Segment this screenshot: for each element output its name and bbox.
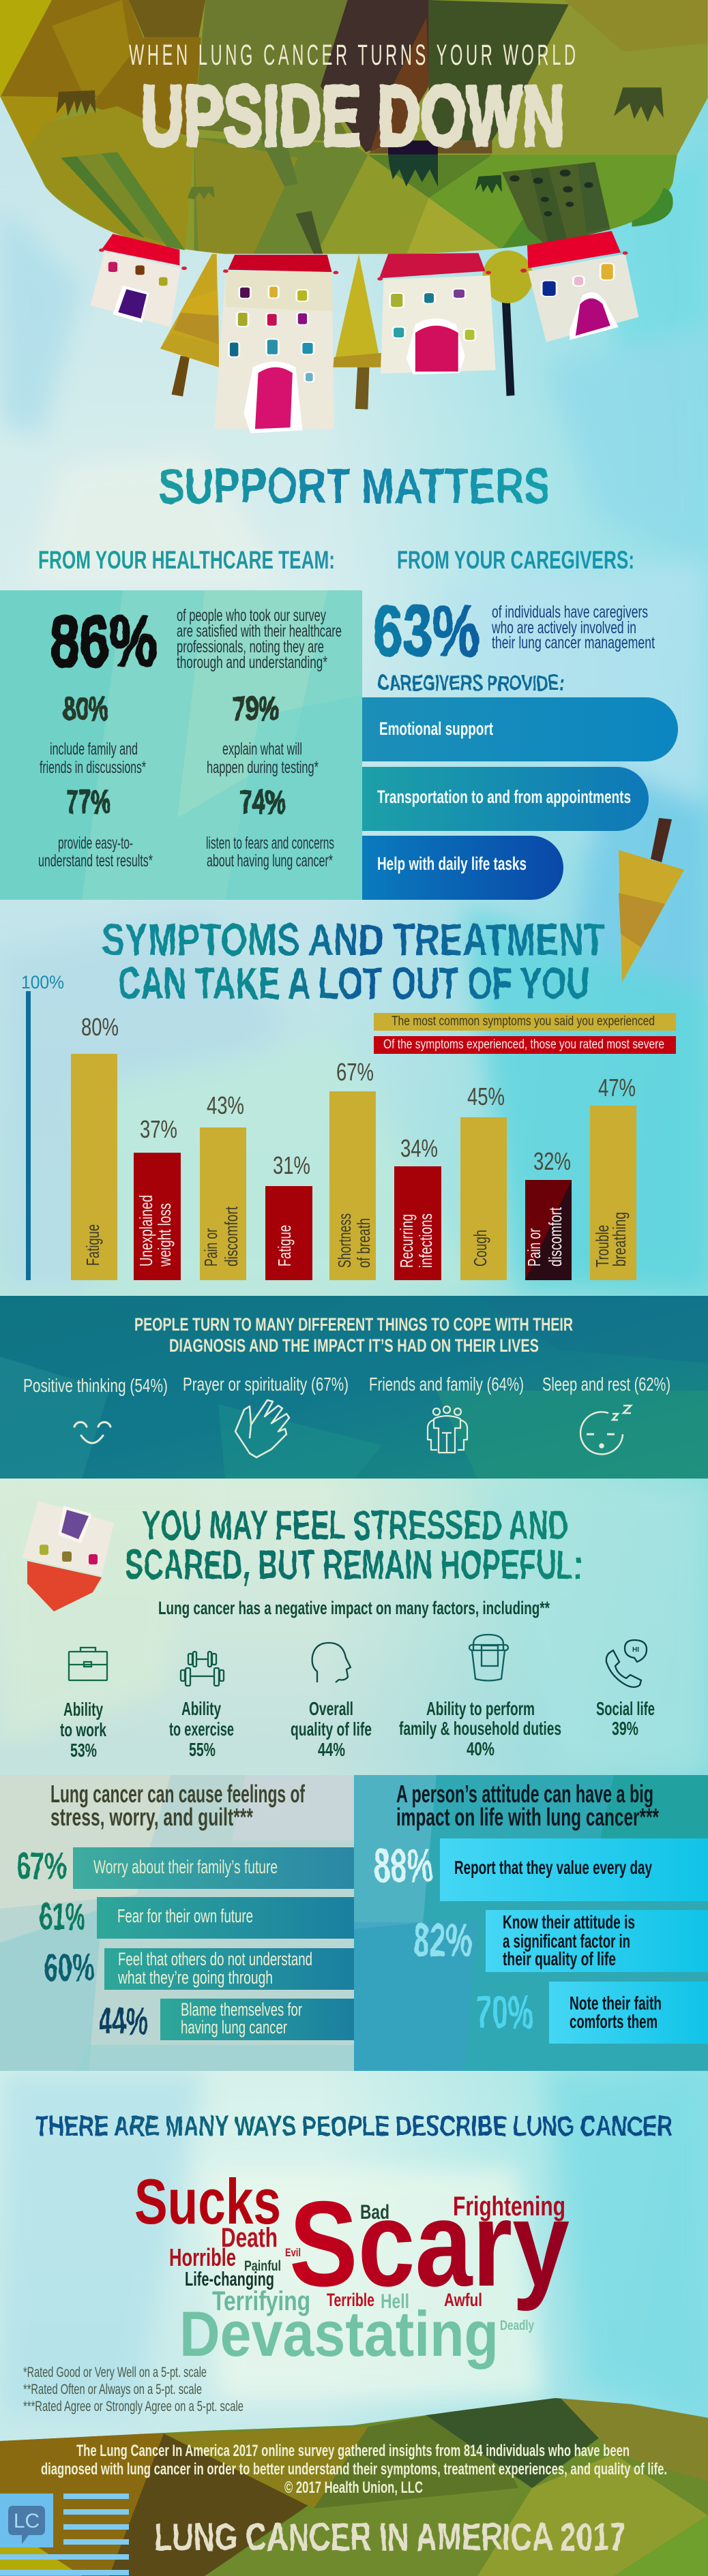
bar: recurring infections 34 [394,1134,441,1280]
bar: others do not understand [44,1945,354,1990]
text: satisfied with healthcare professionals [177,606,342,672]
bar: fear for future: 61% [40,1895,86,1938]
bar: significant factor: a significant factor in [503,1930,630,1952]
pill: daily tasks [362,836,563,900]
bar: unexplained weight loss 37: Unexplained [136,1195,156,1267]
factor: social life [596,1640,655,1739]
bar: shortness of breath 67: of breath [353,1218,374,1268]
bar: recurring infections 34: Recurring [396,1214,417,1268]
bar: fatigue 31: Fatigue [274,1225,295,1267]
bar: trouble breathing 47: 47% [598,1074,636,1102]
factor: ability to work: to work [60,1719,106,1740]
stat: 79 percent: explain what will [222,740,302,759]
bar: significant factor: Know their attitude is [503,1911,635,1933]
factor: social life: HI [632,1646,639,1654]
axis: 100% [21,972,64,992]
stat: 63 percent caregivers [373,591,655,671]
word cloud: Terrible [327,2290,374,2310]
bar: pain or discomfort 32 [524,1147,572,1280]
word cloud: Devastating [179,2298,499,2369]
factor: ability to exercise [169,1652,234,1760]
panel: coping band [0,1296,708,1479]
bar: significant factor [413,1910,708,1972]
heading: from your healthcare team: FROM YOUR HEALTHCARE TEAM: [38,546,335,574]
text: satisfied with healthcare professionals: thorough and understanding* [177,653,327,672]
stat: 86 percent: 86% [50,601,157,682]
stat: 74 percent: listen to fears and concerns [206,834,334,853]
stat: 80 percent: 80% [63,691,108,727]
bar: faith comforts: comforts them [570,2011,658,2032]
stat: 77 percent: understand test results* [38,851,153,870]
bar: pain or discomfort 43: 43% [207,1091,244,1119]
bar: fatigue 80: 80% [81,1013,119,1041]
bar: shortness of breath 67: Shortness [334,1213,355,1268]
footnotes [23,2365,244,2414]
stat: 79 percent: happen during testing* [207,758,319,777]
icon: mini upside-down house [23,1501,114,1611]
stat: 63 percent caregivers: who are actively involved in [491,618,636,637]
bar: shortness of breath 67: 67% [336,1058,374,1086]
text: survey description: © 2017 Health Union, LLC [284,2479,423,2497]
bar: trouble breathing 47 [590,1074,636,1280]
text: survey description [41,2442,667,2497]
bar: pain or discomfort 43 [200,1091,246,1280]
bar: value every day: 88% [374,1839,433,1892]
heading: stress worry guilt [50,1780,306,1831]
bar: blame themselves: 44% [98,1999,148,2042]
heading: people turn to [134,1314,573,1356]
icon: falling tree [619,818,684,982]
coping item: sleep and rest [542,1374,670,1454]
striped trunk on hill [61,152,185,250]
stat: 80 percent: include family and [50,740,138,759]
bar: cough 45: 45% [467,1082,505,1110]
stat: 74 percent: about having lung cancer* [207,851,333,870]
bar: trouble breathing 47: Trouble [592,1225,613,1267]
footer hill [0,2386,708,2576]
heading: support matters: SUPPORT MATTERS [158,459,550,514]
bar: fatigue 80 [71,1013,119,1280]
coping item: positive thinking [23,1375,168,1443]
factor: household duties: 40% [467,1738,495,1759]
bar: others do not understand: 60% [44,1945,95,1988]
factor: household duties: Ability to perform [426,1698,535,1719]
word cloud: Death [221,2223,278,2253]
bar: faith comforts: Note their faith [570,1992,662,2014]
bar: cough 45: Cough [470,1230,490,1267]
house 2 [214,255,338,434]
left cone tree [160,254,219,397]
bar: significant factor: 82% [413,1913,472,1967]
hill posts [257,127,323,254]
bar: unexplained weight loss 37: 37% [140,1115,177,1143]
bar: blame themselves: having lung cancer [181,2017,287,2037]
bar chart: symptoms [21,972,676,1280]
text: negative impact intro: Lung cancer has a negative impact on many factors, including** [158,1598,550,1618]
bar: recurring infections 34: infections [415,1213,436,1268]
coping item: prayer: Prayer or spirituality (67%) [183,1374,349,1395]
word cloud: Evil [285,2246,301,2259]
word cloud: Scary [289,2176,570,2312]
bush [632,188,673,227]
logo: LC [0,2494,129,2575]
bar: cough 45 [460,1082,507,1280]
factor: household duties [399,1635,561,1759]
bar: unexplained weight loss 37 [134,1115,181,1280]
word cloud: Awful [444,2290,482,2310]
bar: worry about family [16,1844,354,1889]
bar: trouble breathing 47: breathing [609,1212,630,1267]
pill: daily tasks: Help with daily life tasks [377,853,527,874]
legend: The most common symptoms you said you experienced [392,1014,655,1029]
stat: 77 percent: 77% [66,785,110,821]
logo: LC: LC [14,2510,40,2532]
stat: 63 percent caregivers: 63% [373,591,480,671]
bar: fear for future [40,1895,354,1939]
word cloud: Terrifying [212,2286,310,2316]
factor: ability to work: 53% [70,1740,97,1761]
word cloud: Deadly [500,2318,535,2333]
bar: significant factor: their quality of life [503,1948,616,1969]
factor: social life: Social life [596,1698,655,1719]
axis [21,972,64,1280]
round tree [482,250,533,396]
stat: 79 percent [207,691,319,777]
bar: fatigue 31 [265,1151,312,1280]
factor: overall quality of life: Overall [309,1698,353,1719]
bar: others do not understand: Feel that others do not understand [118,1949,312,1969]
coping item: positive thinking: Positive thinking (54%) [23,1375,168,1396]
stat: 77 percent: provide easy-to- [58,834,133,853]
bar: worry about family: Worry about their family’s future [93,1856,278,1877]
house 3 [377,253,496,374]
heading: stress worry guilt: stress, worry, and guilt*** [50,1803,253,1831]
bar: fatigue 31: 31% [273,1151,310,1179]
bar: pain or discomfort 43: discomfort [221,1206,241,1267]
coping item: prayer [183,1374,349,1457]
word cloud: Hell [381,2290,409,2313]
bar: faith comforts: 70% [476,1986,533,2039]
grass tufts [57,87,664,200]
bar: pain or discomfort 32: 32% [533,1147,571,1175]
factor: ability to work [60,1648,107,1761]
text: satisfied with healthcare professionals: professionals, noting they are [177,637,324,656]
factor: ability to exercise: Ability [181,1698,221,1719]
middle cone tree [333,254,381,410]
word cloud [134,2166,570,2369]
factor: social life: 39% [612,1718,638,1739]
stat: 80 percent: friends in discussions* [40,758,146,777]
bar: others do not understand: what they’re going through [117,1967,273,1988]
panel: healthcare team [0,590,362,900]
word cloud: Sucks [134,2166,281,2237]
heading: stress worry guilt: Lung cancer can cause feelings of [50,1780,306,1808]
heading: attitude [396,1780,659,1831]
footnotes: **Rated Often or Always on a 5-pt. scale [23,2382,202,2397]
heading: caregivers provide: CAREGIVERS PROVIDE: [377,671,564,695]
word cloud: Frightening [453,2192,565,2222]
pill: emotional support [362,697,678,761]
panel: stress, worry and guilt [0,1775,354,2071]
footnotes: ***Rated Agree or Strongly Agree on a 5-pt. scale [23,2399,244,2414]
factor: overall quality of life [291,1643,372,1760]
bar: fatigue 80: Fatigue [83,1224,103,1266]
heading: you may feel stressed [125,1502,582,1588]
bar: fear for future: Fear for their own future [117,1905,253,1926]
word cloud: Horrible [169,2243,236,2271]
coping item: friends and family: Friends and family (64%) [369,1374,524,1395]
text: satisfied with healthcare professionals: are satisfied with their healthcare [177,622,342,641]
factor: ability to work: Ability [63,1699,103,1720]
factor: ability to exercise: 55% [189,1739,216,1760]
panel: attitude [354,1775,708,2071]
bar: unexplained weight loss 37: weight loss [154,1203,175,1267]
word cloud: Bad [360,2201,389,2224]
bar: value every day [374,1838,708,1901]
text: satisfied with healthcare professionals: of people who took our survey [177,606,326,625]
coping item: friends and family [369,1374,524,1453]
hill with faceted colours [0,0,708,258]
bar: blame themselves [98,1999,354,2042]
stat: 77 percent [38,785,153,870]
word cloud: Painful [244,2258,281,2274]
heading: symptoms and treatment [102,914,605,1008]
bar: shortness of breath 67 [329,1058,376,1280]
factor: ability to exercise: to exercise [169,1718,234,1740]
bar: faith comforts [476,1982,708,2044]
hero: upside-down hill with houses [0,0,708,434]
bar: pain or discomfort 32: Pain or [524,1228,544,1267]
pill: transportation [362,767,649,831]
house 1 [90,234,187,327]
factor: overall quality of life: 44% [318,1739,345,1760]
footnotes: *Rated Good or Very Well on a 5-pt. scale [23,2365,207,2380]
stat: 79 percent: 79% [233,691,279,727]
word cloud: Life-changing [185,2269,274,2290]
stat: 80 percent [40,691,146,777]
bar: worry about family: 67% [16,1844,67,1887]
pill: emotional support: Emotional support [379,718,493,739]
stat: 74 percent [206,785,334,870]
bar: pain or discomfort 32: discomfort [545,1207,565,1267]
subtitle: when lung cancer turns your world: WHEN LUNG CANCER TURNS YOUR WORLD [129,40,576,72]
bar: pain or discomfort 43: Pain or [201,1228,221,1267]
legend [374,1013,676,1054]
bar: recurring infections 34: 34% [400,1134,438,1162]
factor: household duties: family & household duties [399,1718,561,1739]
building on hill [502,162,610,245]
heading: people turn to: DIAGNOSIS AND THE IMPACT IT’S HAD ON THEIR LIVES [169,1335,539,1356]
factor: overall quality of life: quality of life [291,1718,372,1740]
stat: 74 percent: 74% [239,785,286,821]
bar: blame themselves: Blame themselves for [181,1999,302,2020]
house 4 [520,231,638,342]
